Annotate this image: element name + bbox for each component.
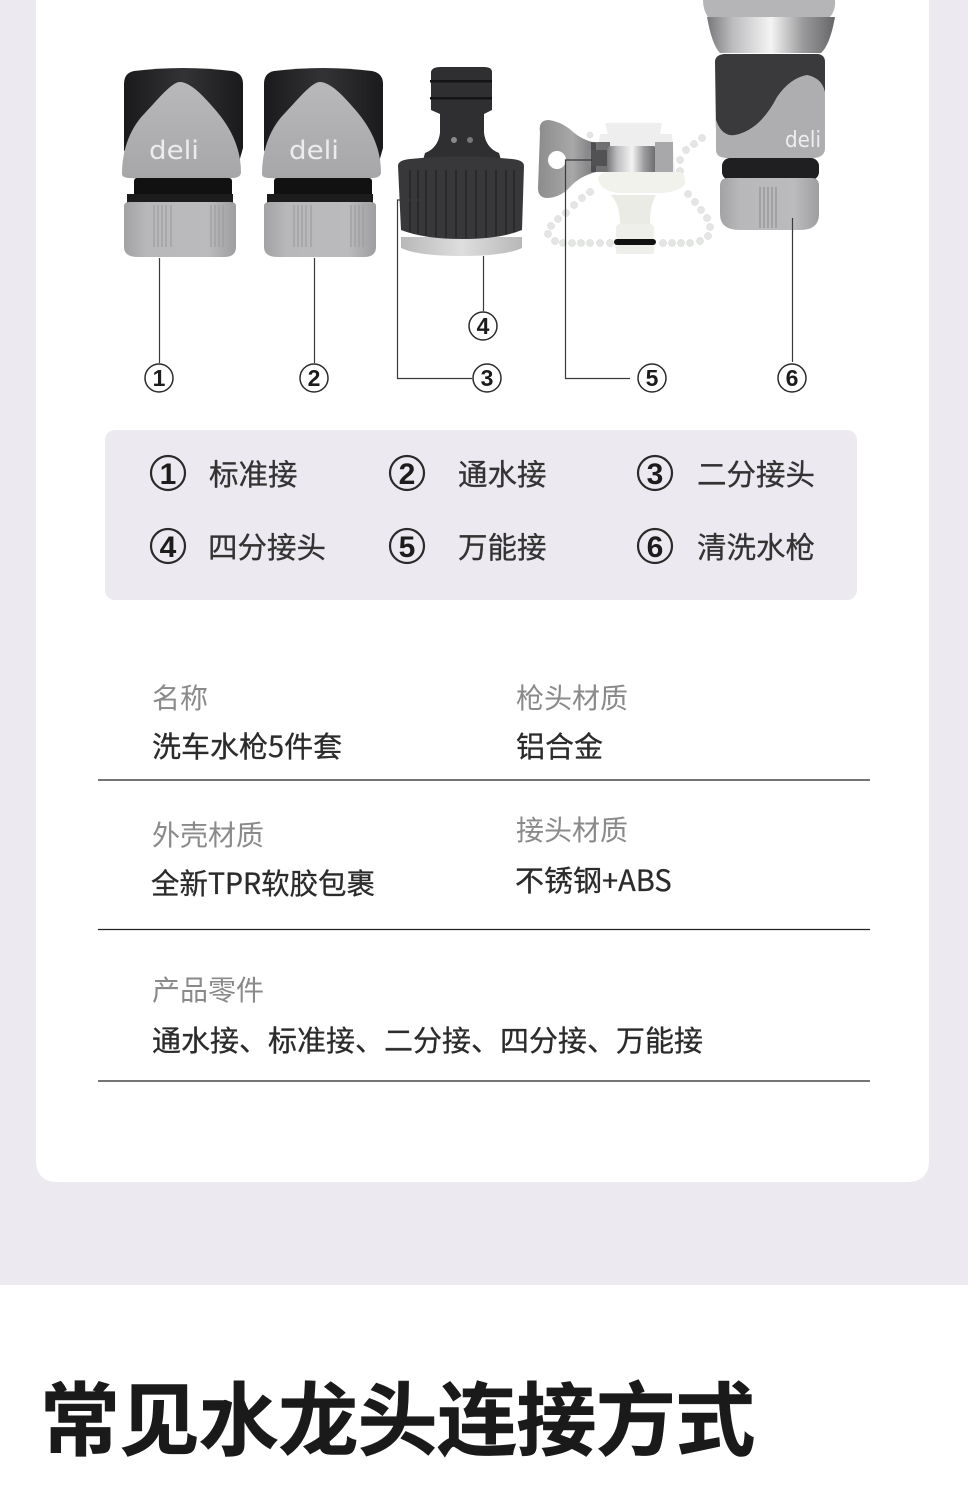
callout number 2: 2 <box>308 365 320 391</box>
product: connector 2: deli <box>289 136 339 166</box>
product: spray gun nozzle: deli <box>785 128 821 153</box>
product: spray gun nozzle <box>703 0 835 230</box>
legend item 1: 1 <box>160 458 176 491</box>
spec: connector material: 不锈钢+ABS <box>515 858 672 900</box>
spec: connector material: 接头材质 <box>516 809 628 849</box>
callout number 3 <box>473 364 501 392</box>
leader line 6 <box>792 218 794 362</box>
legend item 3 <box>638 452 815 494</box>
legend item 5 <box>390 525 547 567</box>
callout number 1 <box>145 364 173 392</box>
panel: part legend <box>105 430 857 600</box>
leader line 4 <box>482 256 484 311</box>
callout number 2 <box>300 364 328 392</box>
legend item 2 <box>390 452 547 494</box>
callout number 6 <box>778 364 806 392</box>
legend item 4 <box>151 525 326 567</box>
legend item 2: 通水接 <box>458 452 547 494</box>
spec: nozzle material: 枪头材质 <box>516 677 628 717</box>
callout number 4: 4 <box>477 313 490 339</box>
bottom white section <box>0 1285 968 1498</box>
spec: name: 洗车水枪5件套 <box>152 724 342 766</box>
legend item 3: 二分接头 <box>697 452 815 494</box>
callout number 4 <box>469 312 497 340</box>
legend item 2: 2 <box>399 458 415 491</box>
spec: shell material: 全新TPR软胶包裹 <box>151 861 375 903</box>
leader line 5 <box>566 160 630 378</box>
spec: shell material <box>151 814 375 903</box>
product: universal connector <box>538 120 714 254</box>
legend item 1: 标准接 <box>209 452 298 494</box>
spec: connector material <box>515 809 672 900</box>
legend item 6: 清洗水枪 <box>697 525 815 567</box>
panel: product card <box>36 0 929 1182</box>
spec: parts: 通水接、标准接、二分接、四分接、万能接 <box>152 1018 703 1060</box>
callout number 3: 3 <box>481 365 493 391</box>
product: connector 1 <box>122 68 243 257</box>
spec: name <box>152 677 342 766</box>
product: connector 2 <box>262 68 383 257</box>
spec: name: 名称 <box>152 677 208 717</box>
product: connector 1: deli <box>149 136 199 166</box>
leader line 2 <box>314 258 316 363</box>
legend item 4: 4 <box>160 531 177 564</box>
legend item 5: 万能接 <box>458 525 547 567</box>
spec: parts <box>152 969 703 1060</box>
callout number 5 <box>638 364 666 392</box>
legend item 3: 3 <box>647 458 663 491</box>
legend item 6 <box>638 525 815 567</box>
spec: shell material: 外壳材质 <box>152 814 264 854</box>
leader line 1 <box>158 258 160 363</box>
legend item 6: 6 <box>647 531 663 564</box>
legend item 4: 四分接头 <box>208 525 326 567</box>
legend item 1 <box>151 452 298 494</box>
legend item 5: 5 <box>399 531 415 564</box>
bead chain <box>544 132 714 246</box>
callout number 6: 6 <box>786 365 798 391</box>
leader line 3 <box>398 200 472 378</box>
heading: common faucet connections: 常见水龙头连接方式 <box>40 1357 755 1473</box>
product: quarter-inch tap adapter <box>398 67 524 256</box>
callout number 5: 5 <box>646 365 659 391</box>
spec: nozzle material: 铝合金 <box>516 724 603 766</box>
callout number 1: 1 <box>153 365 166 391</box>
spec: nozzle material <box>516 677 628 766</box>
spec: parts: 产品零件 <box>152 969 264 1009</box>
